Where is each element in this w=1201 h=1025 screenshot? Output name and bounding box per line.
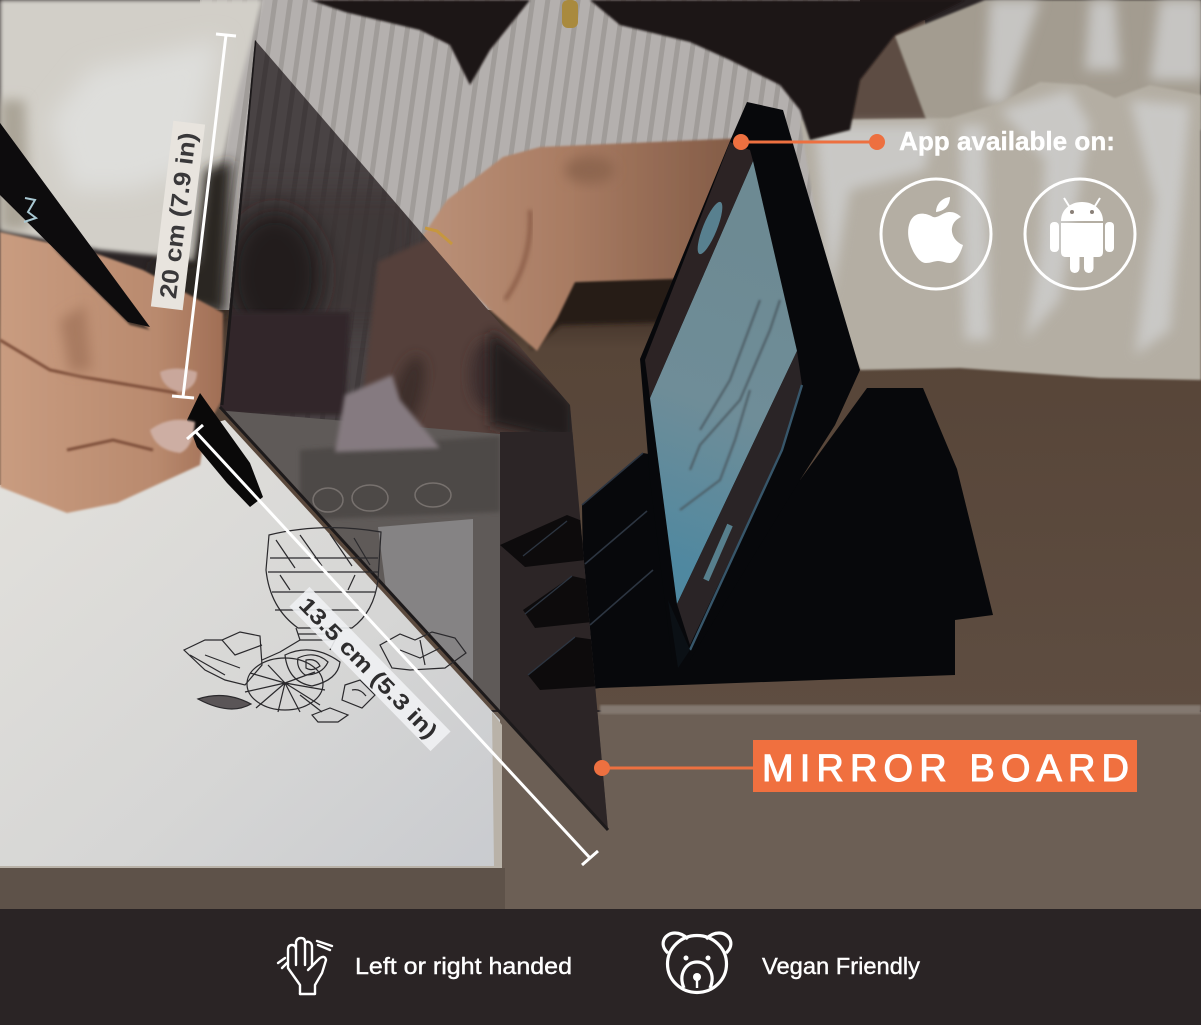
paper shadow on table (0, 868, 505, 909)
icon: apple (881, 179, 991, 289)
pen over hand (0, 123, 150, 327)
shadow below centre hand (530, 270, 700, 350)
phone camera oval (693, 199, 727, 257)
knuckle shade (60, 305, 92, 372)
table surface lower plank (0, 712, 1201, 910)
reflected app bar (300, 436, 500, 520)
mirror label box (753, 740, 1137, 792)
left hand (0, 195, 223, 513)
stand base (582, 388, 993, 690)
heading: app available: App available on: (899, 126, 1115, 156)
dimension: width 13.5 cm (187, 425, 598, 865)
sleeve highlights (815, 90, 1190, 355)
reflected pale screen (378, 519, 473, 680)
text: vegan friendly: Vegan Friendly (762, 953, 921, 979)
dark mirror corner (490, 330, 575, 445)
pen lower section (187, 393, 263, 507)
phone top bezel reflection (645, 142, 753, 398)
mirror lower edge (220, 407, 608, 830)
height label: 20 cm (7.9 in) (155, 131, 202, 300)
mirror base (220, 40, 608, 827)
width line with end caps (187, 425, 598, 865)
sketch: jar and flowers (184, 528, 466, 722)
fingernails (160, 368, 197, 392)
paper right edge (0, 712, 502, 868)
callout: app connector (733, 134, 885, 150)
centre hand (420, 138, 745, 351)
reflected hand (366, 240, 543, 434)
callout: mirror board (594, 740, 1137, 792)
phone lower bezel (677, 351, 802, 645)
reflected sheet (215, 410, 500, 730)
finger creases (0, 340, 177, 450)
mirror label text: MIRROR BOARD (762, 748, 1129, 790)
connector end dot (869, 134, 885, 150)
mirror connector (602, 766, 755, 770)
mirror right strip (500, 432, 612, 835)
ring (425, 228, 452, 244)
mirror left edge (222, 40, 255, 405)
height label (151, 121, 205, 310)
finger crease (505, 210, 530, 300)
shirt shadow next to mirror (145, 160, 232, 315)
paper sheet (0, 420, 500, 868)
mirror board (220, 40, 608, 828)
lower bezel teal accent (706, 525, 730, 580)
white sweater left (0, 0, 262, 262)
ribbed shirt (200, 0, 860, 310)
height line with end caps (172, 34, 236, 398)
table surface upper plank (0, 300, 1201, 710)
reflected finger shadows (396, 356, 427, 416)
connector line (741, 140, 877, 144)
reflected teeth lines (523, 521, 575, 675)
phone screen (650, 161, 797, 604)
text: left or right handed: Left or right handed (355, 953, 572, 979)
mirror lower dark area (205, 312, 350, 415)
icon: android (1025, 179, 1135, 289)
width label (289, 587, 451, 751)
reflected pale bright patch (335, 375, 440, 452)
mirror mid shade (229, 186, 422, 324)
phone body (640, 102, 860, 660)
footer band (0, 909, 1201, 1025)
dimension: height 20 cm (151, 34, 236, 398)
stand slot lines (582, 453, 653, 625)
pen logo (24, 198, 36, 222)
hair right (590, 0, 965, 140)
table seam (600, 705, 1201, 714)
knuckle shade (565, 156, 615, 184)
phone bottom tail (668, 600, 690, 668)
sweater highlights left (50, 40, 220, 190)
reflected app buttons (313, 483, 451, 512)
sweater edge tan (0, 100, 30, 230)
mirror dot (594, 760, 610, 776)
connector start dot (733, 134, 749, 150)
icon: bear (663, 933, 731, 992)
sweater top right (895, 0, 1201, 130)
wall behind sleeve (840, 20, 935, 125)
phone edge highlight (690, 385, 802, 650)
width label: 13.5 cm (5.3 in) (294, 592, 442, 744)
sweater top right highlights (985, 0, 1201, 105)
phone sketch on screen (680, 300, 780, 510)
hair left (310, 0, 530, 85)
icon: hand (278, 938, 332, 994)
right sleeve (800, 82, 1201, 380)
reflected stand teeth (500, 515, 600, 690)
pen upper section (0, 123, 150, 327)
pendant (562, 0, 578, 28)
mirror dark blob (227, 210, 323, 340)
